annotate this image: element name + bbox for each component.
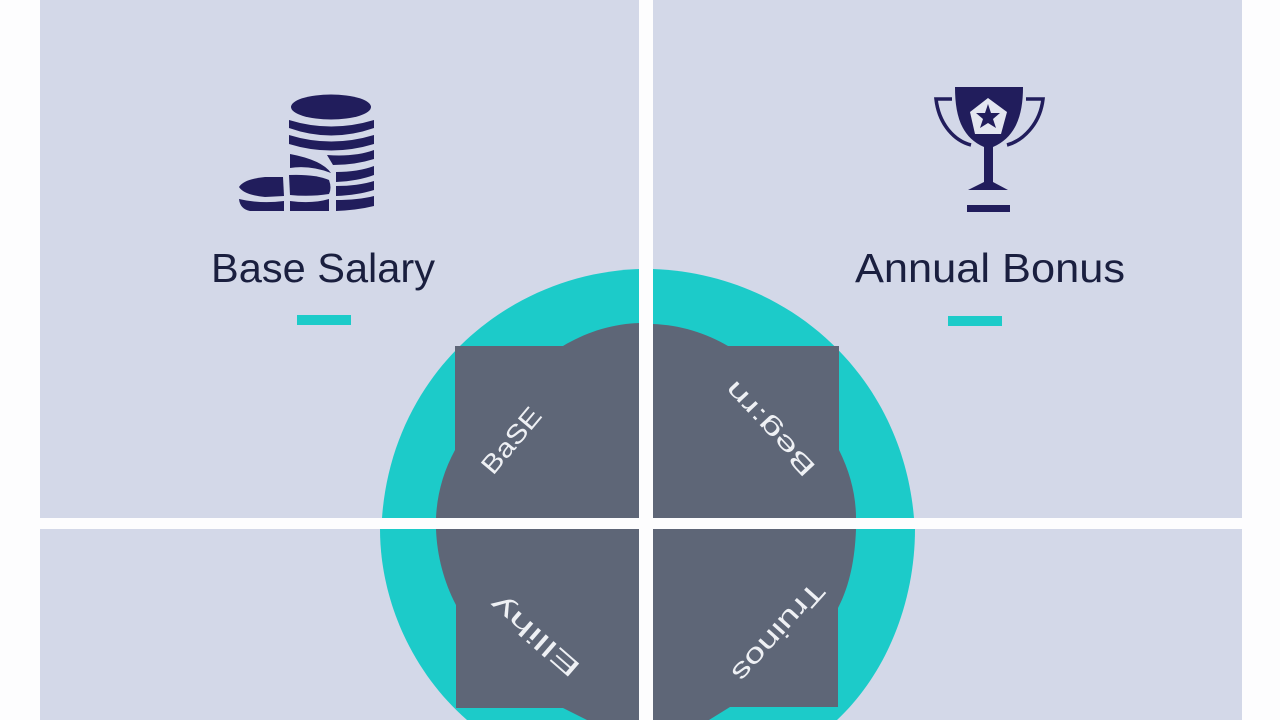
icon: trophy bbox=[936, 87, 1043, 212]
icon: coin stacks bbox=[239, 94, 374, 211]
rotated label: bottom left: Ellihy bbox=[484, 589, 586, 683]
rotated label: top left: BaSE bbox=[475, 401, 548, 480]
heading: Base Salary: Base Salary bbox=[211, 245, 435, 291]
heading: Annual Bonus: Annual Bonus bbox=[855, 245, 1125, 291]
rotated label: bottom right: Truinos bbox=[726, 576, 831, 688]
accent bar: Base Salary bbox=[297, 315, 351, 325]
central teal ring, split by the white gutters bbox=[380, 269, 915, 720]
central slate shape, split into four quadrants bbox=[436, 323, 856, 720]
accent bar: Annual Bonus bbox=[948, 316, 1002, 326]
rotated label: top right: Beg:rn bbox=[719, 375, 821, 482]
